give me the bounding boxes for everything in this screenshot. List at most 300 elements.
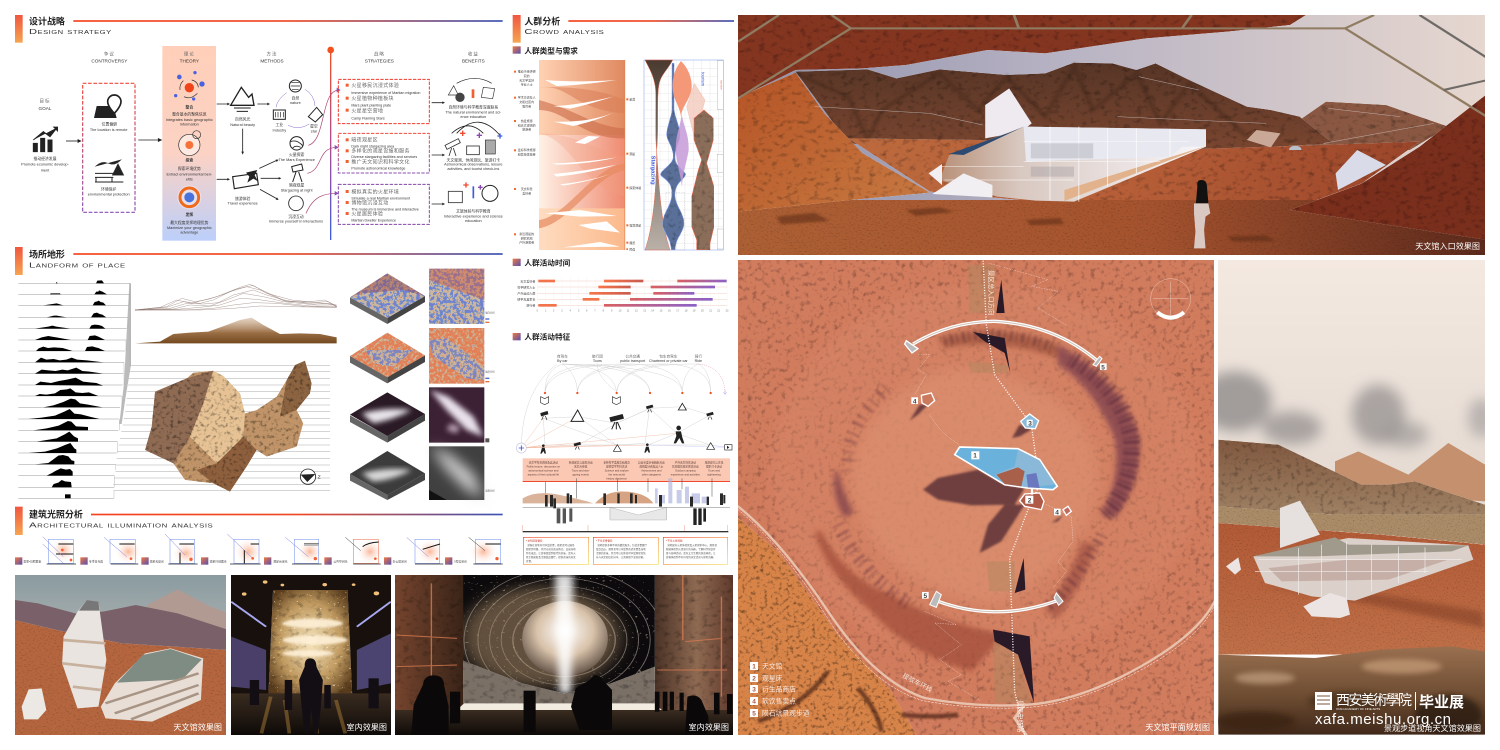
photo: walkway view render <box>1198 258 1495 735</box>
plan labels: 3 <box>1028 420 1032 428</box>
activity icons <box>540 397 715 454</box>
photo: observatory exterior render <box>10 570 229 737</box>
analysis text boxes: 及饮品店。观星者可以享受到各式美食及当地 <box>596 547 646 551</box>
panel: controversy <box>83 83 135 212</box>
panel: theory: efits <box>186 177 193 181</box>
foreground ground <box>738 200 1488 257</box>
activity descriptions: history of science <box>606 476 627 480</box>
gantt chart: 旅行者 <box>526 303 535 308</box>
legend: 2 <box>752 676 756 682</box>
panel: benefits: The natural environment and sci- <box>445 110 502 114</box>
panel: controversy: The location is remote <box>90 128 128 132</box>
gantt chart: 10 <box>619 309 622 312</box>
gantt chart: 8 <box>603 309 605 312</box>
methods icons and labels: Industry <box>273 128 286 132</box>
activity descriptions: 天文学科普讲座及其活动 <box>529 460 558 464</box>
legend: 观星床 <box>762 674 783 682</box>
gantt chart: 21 <box>709 309 713 312</box>
diagram 2 <box>80 537 142 565</box>
wall lights <box>396 575 727 697</box>
mural bright figures <box>282 619 348 657</box>
gantt chart <box>517 277 729 312</box>
crystal pods <box>929 130 1386 197</box>
sankey diagram: 和营地体验者 <box>518 151 536 156</box>
panel: crowd activity features <box>513 332 732 564</box>
density vase chart <box>644 60 724 250</box>
methods icons and labels: star <box>311 129 318 133</box>
methods icons and labels: 火星探索 <box>289 152 304 157</box>
diagram 2: 冬季日光角 <box>89 560 103 564</box>
gantt chart: 1 <box>545 309 547 312</box>
methods icons and labels: 自然风光 <box>235 117 250 122</box>
panel: strategies: The museum is immersive and interactive <box>351 207 419 211</box>
pointer lines <box>546 478 712 498</box>
dotted main walkway <box>983 258 1040 735</box>
panel: strategies: Mars plant planting plate <box>351 104 391 108</box>
analysis text boxes: • 文明游客餐饮 <box>526 539 543 543</box>
sankey diagram: 教育者 <box>522 103 531 108</box>
stage and floor <box>457 703 662 710</box>
crater outer slope <box>771 285 1198 658</box>
analysis text boxes: 游客体验到不同寻常的天文活动与探索奇趣。 <box>666 555 716 559</box>
contour lines behind terrain <box>113 366 330 491</box>
panel: benefits: 自然环境与科学教育深度联系 <box>448 104 498 109</box>
observatory main volume <box>940 127 1206 202</box>
foreground blurs <box>1215 659 1482 735</box>
column headers: 目标 <box>40 98 50 105</box>
legend: 衍生品商店 <box>762 684 796 694</box>
gantt chart: 16 <box>668 309 671 312</box>
legend: 天文馆 <box>762 662 783 670</box>
sankey diagram: 星营 <box>629 97 635 102</box>
sankey diagram: 究的 <box>524 73 530 78</box>
mural sparkle <box>268 590 352 695</box>
caption: 天文馆平面规划图 <box>1145 722 1210 732</box>
transport labels: 包车自驾车 <box>659 353 678 358</box>
crystal pods <box>1226 557 1350 618</box>
methods icons and labels: nature <box>290 101 301 105</box>
gantt chart: 0 <box>537 309 539 312</box>
lower scenic arc <box>930 591 1063 612</box>
subheading: crowd type: 人群类型与需求 <box>524 45 578 55</box>
heading: design strategy: 设计战略 <box>29 15 65 26</box>
transport labels: Ride <box>695 359 702 363</box>
panel: theory: advantage <box>180 231 198 235</box>
photo: observatory entrance render <box>738 10 1488 260</box>
activity descriptions: Science and explore <box>605 468 629 472</box>
plan labels: 2 <box>1028 498 1032 504</box>
panel: theory: 整合基本的聚焦信息 <box>172 112 207 117</box>
panel: crowd analysis <box>513 15 734 312</box>
diagram 7: 办公区采光 <box>393 560 407 564</box>
midground slope <box>848 138 1420 200</box>
plan labels: 4 <box>1055 510 1059 516</box>
activity descriptions <box>523 458 730 482</box>
crater gullies <box>838 334 1132 608</box>
panel: design strategy <box>15 15 503 241</box>
logo: Xi'an Academy of Fine Arts: xafa.meishu.org.cn <box>1315 711 1451 728</box>
legend: 5 <box>752 710 756 718</box>
left wall <box>394 575 463 735</box>
panel: strategies: Immersive experience of Martian migration <box>351 91 420 95</box>
activity descriptions: gazing events <box>572 472 590 476</box>
gantt chart: 2 <box>553 309 555 312</box>
activity descriptions: sightseeing <box>707 472 721 476</box>
dark fissures <box>758 671 958 731</box>
blurred foreground rock <box>1218 646 1485 735</box>
analysis text boxes: • 不负火星探秘 <box>666 539 683 543</box>
logo: Xi'an Academy of Fine Arts <box>1315 692 1464 728</box>
left rock wall <box>738 73 930 212</box>
heading: crowd: 人群分析 <box>524 15 560 26</box>
sankey diagram: 探索体验 <box>629 185 641 190</box>
transport labels: Chartered or private car <box>649 359 688 363</box>
walkway labels: 景区车行路 <box>1016 700 1025 733</box>
panel: strategies <box>338 79 429 224</box>
panel: strategies: 暗夜观星区 <box>351 137 378 144</box>
diagram 6: 公共空间光 <box>333 560 348 564</box>
diagram 8: 3号馆采光 <box>454 560 467 564</box>
sankey diagram: 爱好科学旅游 <box>518 147 536 152</box>
desert ground <box>15 620 229 737</box>
activity descriptions: 户外天文科普活动 <box>675 460 696 464</box>
tall crystal volume <box>62 600 106 708</box>
dark hall <box>394 570 739 740</box>
faceted volume <box>101 648 203 722</box>
small number tags <box>911 363 1107 599</box>
ring road <box>738 506 1215 738</box>
logo: Xi'an Academy of Fine Arts: XI'AN ACADEMY OF FINE ARTS <box>1336 707 1380 711</box>
heading: crowd <box>513 15 734 43</box>
light beam <box>555 575 573 693</box>
orb glow <box>462 587 620 687</box>
photo: interior mural hall <box>229 570 396 740</box>
terrain relief model <box>145 361 312 492</box>
gantt chart: 科学研究人士 <box>517 284 535 289</box>
column headers: METHODS <box>260 59 284 64</box>
layered hill silhouette <box>135 318 337 343</box>
heading: illumination: 建筑光照分析 <box>29 508 83 519</box>
heading: crowd: Crowd analysis <box>524 27 605 36</box>
activity descriptions: 营地露营观星体验活动 <box>672 464 699 468</box>
activity descriptions: Outdoor camping <box>675 468 696 472</box>
activity descriptions: other stargazers <box>642 472 662 476</box>
diagram 1 <box>15 537 76 565</box>
panel: strategies: 火星居民体验 <box>351 210 383 217</box>
logo: Xi'an Academy of Fine Arts: 西安美術學院 <box>1336 692 1412 708</box>
far right mountain <box>1266 102 1448 150</box>
sankey diagram: 推动于经济研 <box>518 69 536 74</box>
analysis text boxes: 游客在营地内可享受美食，观星者可以围坐 <box>527 543 575 547</box>
heading: design strategy: Design strategy <box>29 27 112 36</box>
gantt chart: 23 <box>726 309 729 312</box>
foreground clods <box>776 207 1276 241</box>
methods icons and labels: 星空 <box>310 123 318 128</box>
methods icons and labels: 暗夜观星 <box>289 183 304 188</box>
transport labels: Tours <box>593 359 602 363</box>
right wall <box>655 575 739 735</box>
diagram 3 <box>141 534 200 566</box>
panel: strategies: 博物馆沉浸互动 <box>351 199 389 206</box>
panel: theory: 探索环境优势 <box>178 166 201 171</box>
diagram 5 <box>264 537 323 565</box>
activity descriptions: experience and activities <box>671 472 701 476</box>
column headers <box>39 51 485 111</box>
transport arcs <box>521 364 725 443</box>
plan labels: 5 <box>1101 364 1105 372</box>
analysis text boxes: 营地提供多种不同的餐饮服务，包括美食餐厅 <box>597 543 648 547</box>
transport labels: 骑行 <box>695 353 702 358</box>
orange weathered zone <box>738 518 918 738</box>
analysis text boxes: 美食。 <box>526 559 533 563</box>
analysis text boxes <box>523 537 728 564</box>
methods icons and labels: Travel experience <box>228 202 258 206</box>
goal: economic development icon: Promote economic develop- <box>21 163 70 167</box>
side light <box>231 602 391 690</box>
heading: illumination: Architectural illumination analysis <box>29 520 214 529</box>
activity descriptions: astronomical science and <box>528 468 559 472</box>
legend: 陨石坑景观步道 <box>762 708 810 718</box>
panel: strategies: 推广天文知识和科学文化 <box>351 158 410 165</box>
sankey diagram: 天文科普 <box>521 186 533 191</box>
reflective floor <box>231 693 391 735</box>
activity descriptions: 多种科学类展览和展览 <box>603 460 630 464</box>
methods icons and labels: 工业 <box>276 122 283 127</box>
building shadow <box>1258 585 1485 628</box>
activity descriptions: 旅游观光与文化 <box>705 460 724 464</box>
building <box>1253 501 1473 601</box>
cave ceiling rock <box>738 10 1314 98</box>
sankey diagram: 研究机构 <box>521 235 533 240</box>
methods icons and labels <box>228 80 323 224</box>
goal: economic development icon <box>21 127 70 172</box>
analysis map: elevation dark <box>350 387 489 443</box>
sankey diagram: 文和社区内 <box>519 99 534 104</box>
photo: interior sphere hall <box>394 568 739 740</box>
activity descriptions: 自业余爱好者组织活动 <box>638 460 665 464</box>
diagram 8 <box>445 537 503 565</box>
density vase chart: Stargazing <box>649 156 655 185</box>
plan labels <box>913 364 1105 600</box>
analysis text boxes: 特色菜品，让游客感受到现代的美味。还有火 <box>526 551 576 555</box>
panel: benefits: activities, and tourist check-ins <box>447 167 499 171</box>
methods icons and labels: Immerse yourself in interactions <box>269 220 323 224</box>
panel: theory: 理论 <box>184 51 195 58</box>
hall floor <box>394 710 739 735</box>
legend: 软饮售卖点 <box>762 696 796 706</box>
heading: illumination <box>15 507 503 535</box>
transport labels <box>557 353 702 363</box>
legend: 1 <box>752 664 756 670</box>
walkway labels <box>901 270 1025 733</box>
compass <box>1151 279 1191 319</box>
central axis line <box>306 47 341 240</box>
mountains <box>15 600 229 650</box>
gantt chart: 13 <box>643 309 647 312</box>
activity descriptions: aspects of their cultural life <box>528 472 560 476</box>
panel: benefits: ence education <box>460 115 486 119</box>
analysis map: elevation grey <box>350 446 495 500</box>
analysis map: slope: 坡度分析 <box>485 369 495 373</box>
panel: strategies: 火星星空营地 <box>351 107 383 114</box>
near mountains <box>1218 440 1485 531</box>
panel: theory: information <box>180 123 199 127</box>
analysis map: slope <box>350 328 495 384</box>
sankey diagram: 和天文观测的 <box>518 122 536 127</box>
activity network lines <box>521 407 728 448</box>
panel: strategies: 火星移民沉浸式体验 <box>351 82 399 89</box>
start marker and end marker <box>516 390 732 453</box>
timeline bar <box>523 525 728 532</box>
methods icons and labels: The Mars Experience <box>278 158 315 162</box>
gantt chart: 4 <box>570 309 572 312</box>
sankey diagram: 旅游者 <box>522 127 531 132</box>
transport labels: By car <box>557 359 568 363</box>
heading: landform: Landform of place <box>29 260 126 269</box>
sankey diagram: 露营观星 <box>629 223 641 228</box>
sankey diagram: 热爱旅游 <box>521 118 533 123</box>
heading: landform: 场所地形 <box>29 249 65 260</box>
sankey diagram <box>514 60 641 251</box>
activity descriptions: 观测爱好者及其人士 <box>639 464 664 468</box>
panel: theory: 整合 <box>186 104 193 109</box>
crater rim shading <box>815 331 1140 671</box>
diagram 7 <box>384 537 444 565</box>
floor reflections <box>261 697 345 733</box>
panel: theory: 发挥 <box>186 212 193 217</box>
analysis text boxes: 营地配有火星体验区及火星探索中心，观星者 <box>667 543 718 547</box>
gantt chart: 17 <box>676 309 680 312</box>
streetscape crowd strip <box>523 478 730 525</box>
mountain ridges <box>796 67 1247 140</box>
sankey diagram: 户外游客者 <box>519 240 534 245</box>
transport labels: public transport <box>620 359 645 363</box>
gold mural <box>268 590 352 695</box>
panel: theory: Maximize your geographic <box>167 226 212 230</box>
activity descriptions: 参观展览与观星活动 <box>569 460 593 464</box>
activity descriptions: Tours and <box>708 468 720 472</box>
crowd of light at bottom <box>462 660 655 703</box>
sankey diagram: 亲近观星的 <box>519 231 534 236</box>
panel: theory <box>162 46 216 241</box>
hall sparkle <box>464 575 655 702</box>
methods icons and labels: Natural beauty <box>230 123 255 127</box>
red ground <box>1218 523 1485 655</box>
rock base <box>738 258 1218 738</box>
column headers: 争议 <box>104 51 115 58</box>
gantt chart: 天文爱好者 <box>520 278 535 283</box>
analysis map: aspect: 坡向分析 <box>485 310 495 314</box>
gantt chart: 7 <box>594 309 596 312</box>
transport labels: 公共交通 <box>625 353 640 358</box>
activity descriptions: Astronomers and <box>641 468 662 472</box>
methods icons and labels: 沉浸互动 <box>288 214 304 219</box>
panel: theory: Extract environmental ben- <box>166 173 213 177</box>
diagram 3: 观星天窗光 <box>150 560 164 564</box>
storm clouds <box>1198 371 1495 448</box>
right rock wall <box>1290 93 1488 240</box>
column headers: 战略 <box>374 51 385 58</box>
plan: observatory site plan <box>738 258 1218 738</box>
panel: theory: THEORY <box>180 59 199 64</box>
gantt chart: 15 <box>660 309 663 312</box>
sankey diagram: 爱好者 <box>522 190 531 195</box>
panel: benefits <box>444 78 503 223</box>
gantt chart: 6 <box>586 309 588 312</box>
legend: 3 <box>752 686 756 694</box>
gantt chart: 户外运动人群 <box>517 291 535 296</box>
panel: controversy: environmental protection <box>88 193 130 197</box>
gantt chart: 14 <box>651 309 655 312</box>
heading: design strategy <box>15 15 503 43</box>
panel: strategies: 模拟真实的火星环境 <box>351 188 399 195</box>
gantt chart: 3 <box>561 309 563 312</box>
caption: 景观步道视角天文馆效果图 <box>1384 723 1481 733</box>
sankey diagram: 天文学爱好 <box>519 77 534 82</box>
walkway labels: 接驳车环线 <box>901 671 934 694</box>
concentric light rings <box>464 568 664 712</box>
analysis text boxes: 星主题菜肴及主题甜品餐厅，提供美味的天文 <box>526 555 576 559</box>
main observatory building <box>955 447 1057 490</box>
section profile stack <box>18 280 131 498</box>
transport labels: 自驾车 <box>557 353 568 358</box>
analysis text boxes: 乐与天文知识的分享，让游客留下深刻印象。 <box>596 555 646 559</box>
plan labels: 4 <box>913 398 917 406</box>
heading: landform <box>15 247 503 275</box>
panel: strategies: Dark night stargazing area <box>351 144 395 148</box>
legend <box>750 662 810 718</box>
panel: benefits: 天文观测、休闲游玩、旅游打卡 <box>447 157 500 162</box>
panel: benefits: 文旅体验与科学教育 <box>456 208 491 213</box>
panel: strategies: Diverse stargazing facilities and services <box>351 155 417 159</box>
caption: 天文馆入口效果图 <box>1415 241 1480 251</box>
density vase chart: tourism <box>701 72 706 87</box>
secondary walkways <box>915 263 1073 701</box>
panel: strategies: Camp Flaming Stars <box>351 116 385 120</box>
logo: Xi'an Academy of Fine Arts: 毕业展 <box>1419 694 1464 711</box>
goal: economic development icon: ment <box>41 168 50 172</box>
dark hall <box>229 570 396 740</box>
diagram 4 <box>201 534 263 566</box>
subheading: activity features: 人群活动特征 <box>524 332 571 342</box>
gantt chart: 9 <box>611 309 613 312</box>
activity descriptions: Tours and star- <box>572 468 590 472</box>
methods icons and labels: 旅游体验 <box>235 196 250 201</box>
caption: 室内效果图 <box>347 722 387 732</box>
sankey diagram: 观星 <box>629 151 635 156</box>
observatory tower <box>985 88 1032 138</box>
panel: strategies: 多样化的观星设施和服务 <box>351 148 410 155</box>
sankey diagram: 展览 <box>629 240 635 245</box>
gantt chart: 19 <box>693 309 696 312</box>
diagram 6 <box>324 537 384 565</box>
sankey diagram: 民宿 <box>629 246 635 251</box>
activity descriptions: 天文台参观 <box>574 464 588 468</box>
far mountains <box>1335 443 1485 501</box>
subheading: activity time: 人群活动时间 <box>524 257 571 267</box>
panel: theory: 最大程度发挥地理优势 <box>170 220 209 225</box>
pit surrounds <box>968 265 1031 703</box>
crater floor <box>851 368 1097 605</box>
analysis text boxes: 能够体验到火星旅行的乐趣，了解科学知识并 <box>666 547 716 551</box>
ceiling lights <box>242 580 379 596</box>
sankey diagram: 专业人士 <box>521 82 533 87</box>
visitor silhouettes <box>411 675 733 735</box>
sky <box>1215 258 1488 525</box>
panel: benefits: Astronomical observations, leisure <box>444 163 502 167</box>
column headers: GOAL <box>39 106 52 111</box>
analysis text boxes: 观星并用餐，也可以前往商店购买，品尝当地 <box>526 547 576 551</box>
